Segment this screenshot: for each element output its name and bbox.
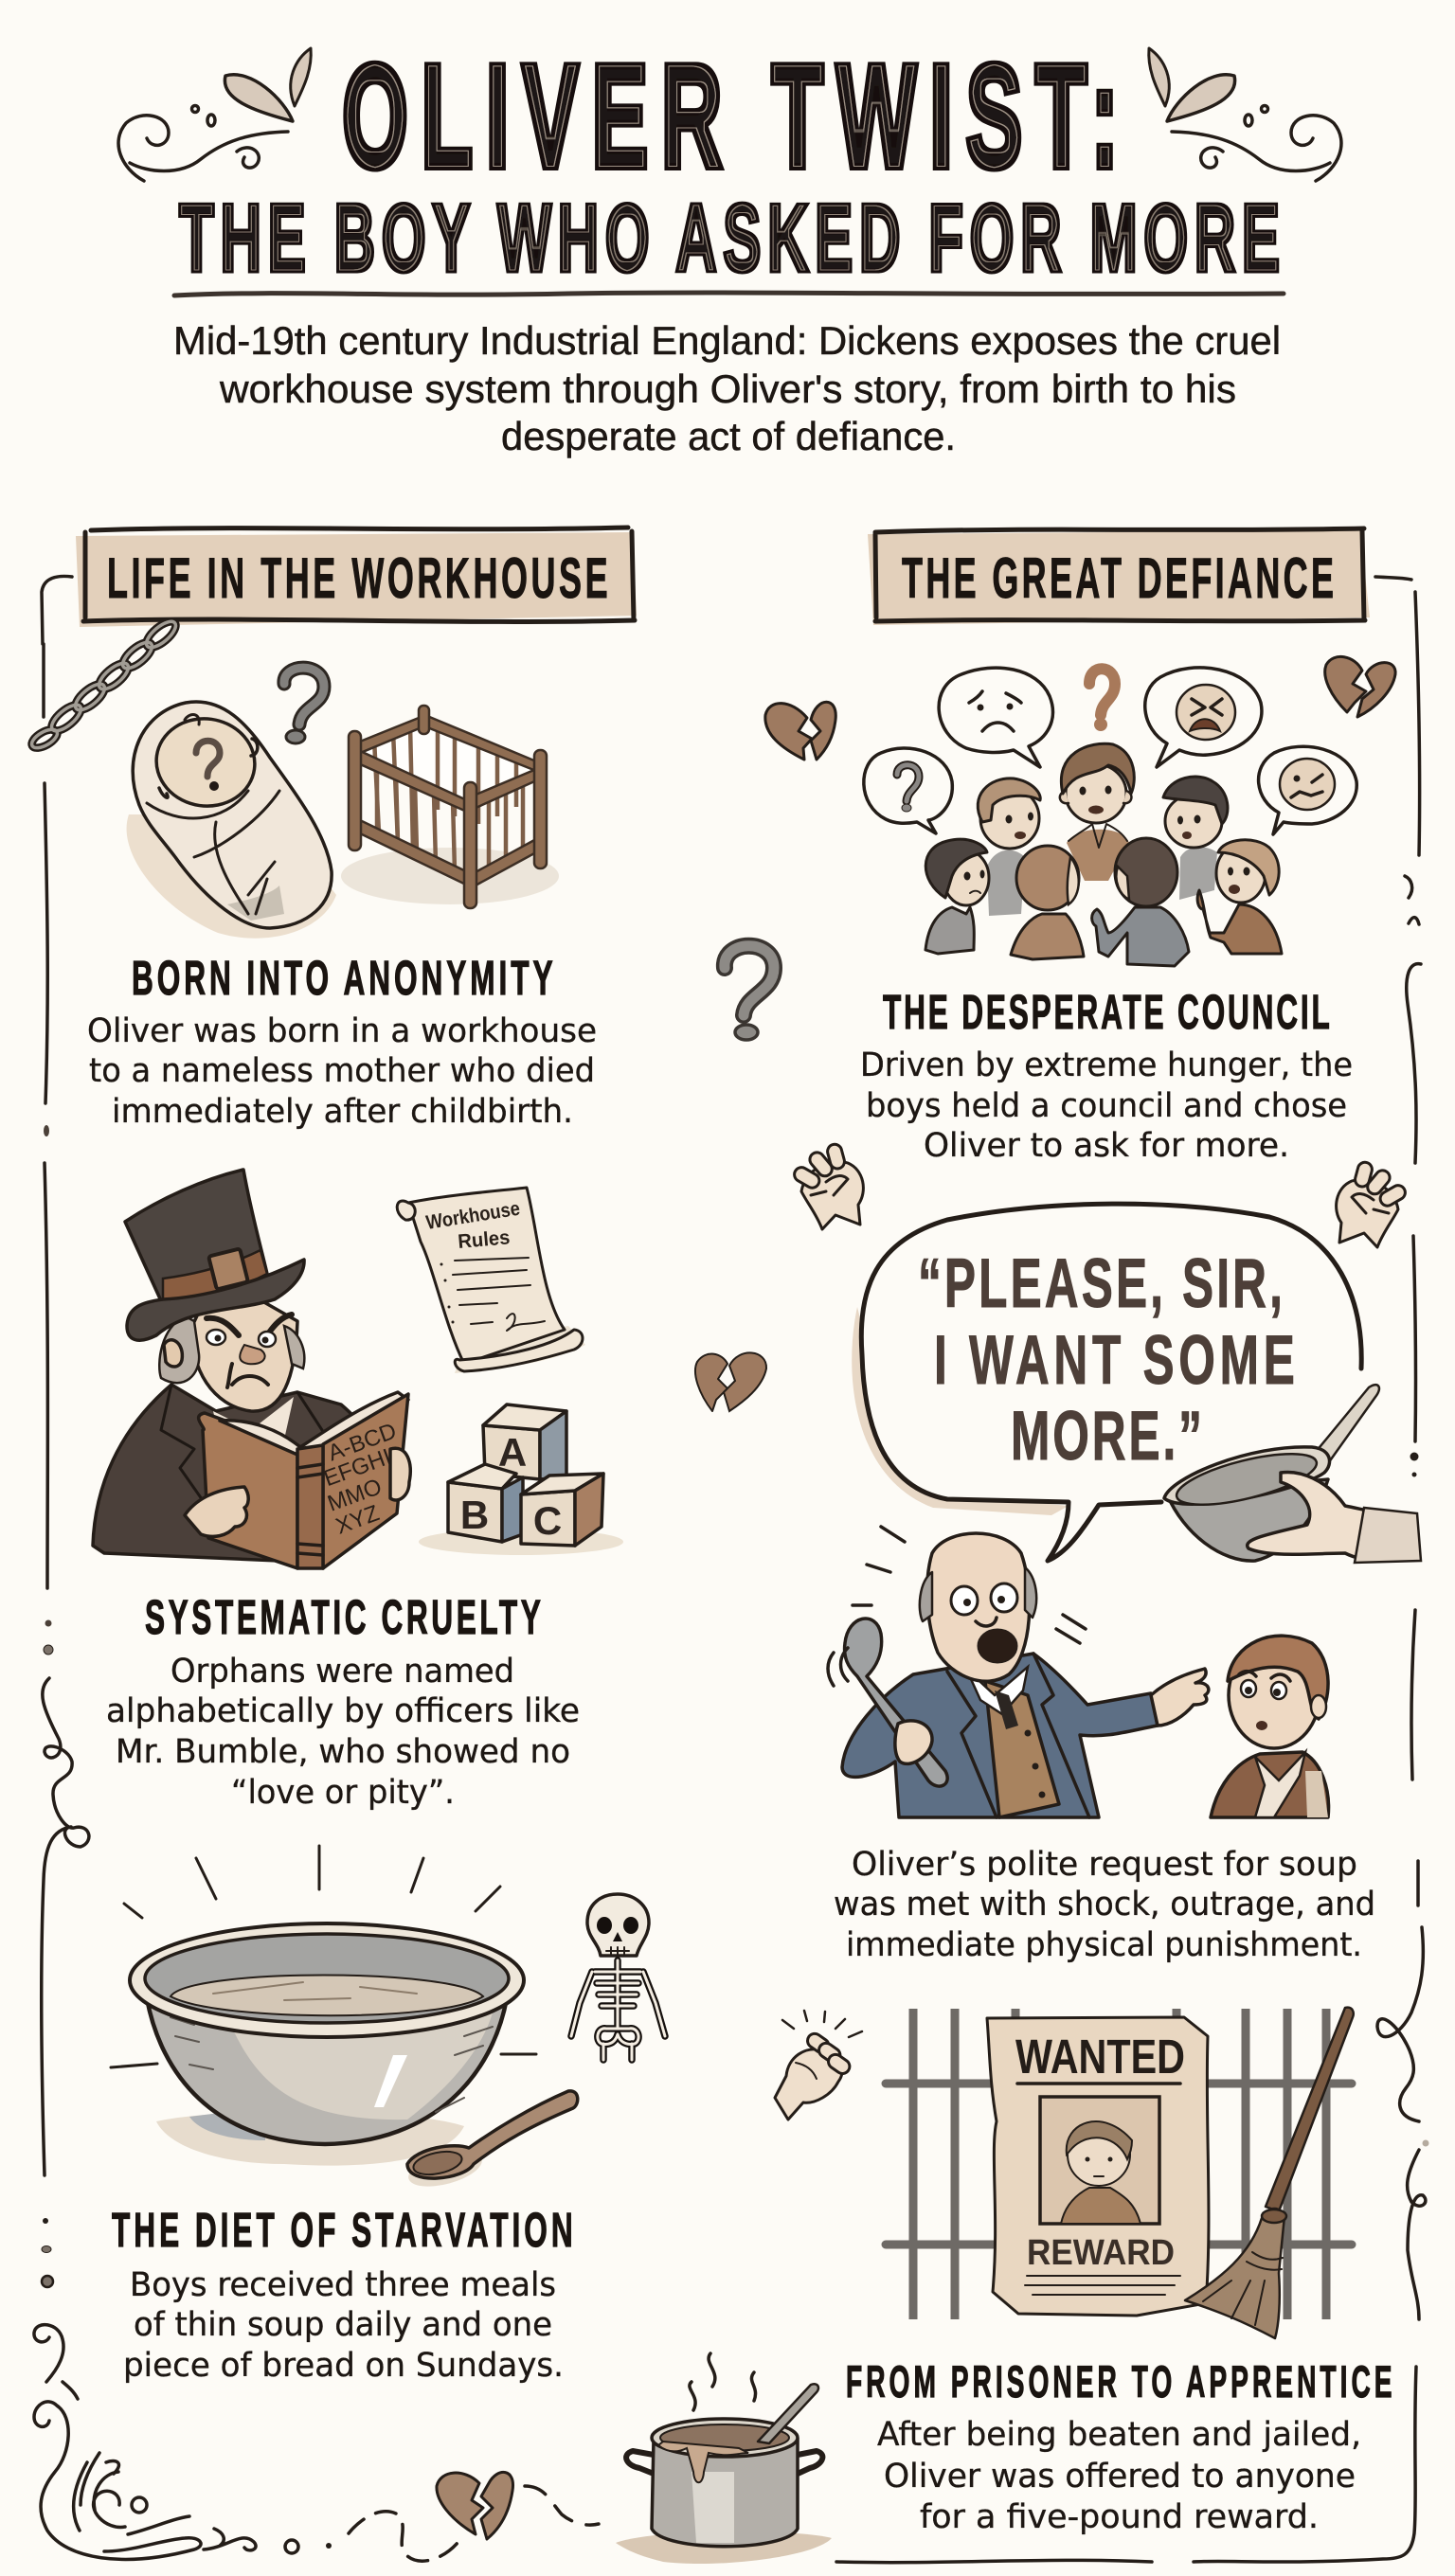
heading: from prisoner to apprentice: FROM PRISONER TO APPRENTICE [846, 2358, 1392, 2407]
boy: back of head left [1011, 846, 1084, 959]
section tag: life in the workhouse [76, 528, 637, 627]
text: the desperate council: Oliver to ask for more. [924, 1127, 1289, 1165]
icon: skeleton [571, 1894, 665, 2060]
icon: question mark by baby [284, 668, 324, 743]
illustration: wanted poster [987, 2017, 1209, 2316]
text: born into anonymity: to a nameless mother who died [89, 1052, 595, 1090]
text: polite request: Oliver’s polite request for soup [852, 1846, 1357, 1884]
text: from prisoner to apprentice: for a five-pound reward. [920, 2498, 1319, 2536]
illustration: alphabet blocks [419, 1404, 623, 1555]
callout: please sir speech bubble: “PLEASE, SIR, [918, 1245, 1283, 1322]
callout: please sir speech bubble: MORE.” [1011, 1398, 1202, 1475]
illustration: mr bumble reading: MMO [324, 1474, 386, 1517]
illustration: alphabet blocks: C [533, 1498, 562, 1543]
illustration: hand holding empty bowl [1164, 1385, 1421, 1563]
heading: the diet of starvation: THE DIET OF STARVATION [112, 2203, 573, 2257]
illustration: alphabet blocks: B [460, 1493, 489, 1537]
illustration: workhouse rules scroll: Workhouse [424, 1198, 522, 1234]
intro text [173, 318, 1281, 458]
border: right [836, 577, 1428, 2563]
heading: born into anonymity: BORN INTO ANONYMITY [132, 951, 553, 1005]
boy: upper right [1163, 777, 1228, 900]
text: the diet of starvation [123, 2266, 564, 2385]
illustration: speech bubbles over council [864, 668, 1356, 834]
text: systematic cruelty: Orphans were named [171, 1653, 514, 1690]
heading: systematic cruelty: SYSTEMATIC CRUELTY [145, 1590, 541, 1644]
subtitle: THE BOY WHO ASKED FOR MORE [179, 185, 1280, 292]
illustration: shocked beadle with ladle [828, 1527, 1209, 1817]
illustration: workhouse rules scroll [397, 1188, 585, 1373]
illustration: swaddled baby [127, 702, 336, 939]
text: born into anonymity: immediately after childbirth. [112, 1093, 573, 1131]
illustration: wooden spoon [404, 2091, 578, 2193]
text: from prisoner to apprentice: After being beaten and jailed, [877, 2416, 1361, 2454]
icon: question mark middle [725, 946, 774, 1040]
text: polite request: was met with shock, outrage, and [834, 1886, 1375, 1923]
illustration: soup pot [616, 2353, 832, 2564]
icon: broken heart top right [1325, 656, 1395, 717]
text: systematic cruelty: “love or pity”. [231, 1774, 455, 1812]
text: the desperate council: Driven by extreme hunger, the [860, 1046, 1353, 1084]
illustration: workhouse rules scroll: Rules [457, 1226, 511, 1253]
text: from prisoner to apprentice: Oliver was offered to anyone [884, 2458, 1356, 2496]
text: the diet of starvation: piece of bread on Sundays. [123, 2347, 564, 2385]
illustration: soup bowl with rays [111, 1846, 536, 2166]
heading: the desperate council: THE DESPERATE COUNCIL [883, 985, 1330, 1039]
flourish: title left [118, 48, 311, 181]
section tag: the great defiance: THE GREAT DEFIANCE [902, 547, 1334, 610]
text: born into anonymity [87, 1012, 597, 1131]
icon: raised fist [775, 2011, 862, 2120]
boy: back center [1060, 743, 1134, 881]
illustration: mr bumble reading: A-BCD [325, 1418, 400, 1466]
icon: fist right [1337, 1161, 1408, 1247]
section tag: the great defiance [868, 528, 1370, 625]
boy: lower left [925, 839, 989, 954]
illustration: wanted poster: REWARD [1027, 2233, 1175, 2273]
illustration: young oliver frightened [1211, 1636, 1329, 1817]
boy: lower right [1197, 840, 1282, 954]
text: systematic cruelty [106, 1653, 580, 1812]
text: polite request [834, 1846, 1375, 1964]
illustration: broom [1185, 2008, 1354, 2338]
text: from prisoner to apprentice [877, 2416, 1361, 2536]
icon: chain [29, 617, 180, 752]
section tag: life in the workhouse: LIFE IN THE WORKHOUSE [107, 547, 608, 610]
illustration: mr bumble reading: XYZ [332, 1500, 383, 1540]
illustration: alphabet blocks: A [498, 1430, 527, 1475]
border: left [42, 576, 89, 2287]
boy: back of head right [1092, 838, 1189, 966]
text: the diet of starvation: Boys received three meals [130, 2266, 556, 2304]
text: polite request: immediate physical punishment. [846, 1926, 1362, 1964]
illustration: prison bars [886, 2009, 1352, 2319]
icon: broken heart bottom [437, 2472, 513, 2539]
text: born into anonymity: Oliver was born in a workhouse [87, 1012, 597, 1050]
illustration: mr bumble reading [93, 1170, 410, 1568]
icon: broken heart top left of right column [765, 702, 835, 760]
callout: please sir speech bubble [852, 1204, 1361, 1561]
illustration: mr bumble reading: EFGHI [320, 1444, 395, 1492]
icon: fist left [792, 1143, 863, 1229]
text: systematic cruelty: alphabetically by officers like [106, 1692, 580, 1730]
icon: question mark above council [1089, 669, 1115, 731]
illustration: group of boys [925, 743, 1282, 966]
intro text: workhouse system through Oliver's story, from birth to his [219, 367, 1236, 411]
text: the desperate council: boys held a council and chose [866, 1087, 1347, 1125]
intro text: desperate act of defiance. [501, 414, 956, 458]
flourish: title right [1149, 48, 1341, 181]
icon: broken heart middle [695, 1352, 766, 1411]
illustration: empty crib [341, 706, 559, 908]
text: the diet of starvation: of thin soup daily and one [134, 2306, 552, 2344]
boy: upper left [978, 778, 1040, 916]
intro text: Mid-19th century Industrial England: Dickens exposes the cruel [173, 318, 1281, 363]
border: corner flourish bottom-left [34, 2325, 599, 2561]
title: OLIVER TWIST: [342, 33, 1119, 198]
illustration: wanted poster: WANTED [1015, 2030, 1185, 2084]
text: systematic cruelty: Mr. Bumble, who showed no [116, 1733, 570, 1771]
text: the desperate council [860, 1046, 1353, 1165]
callout: please sir speech bubble: I WANT SOME [934, 1322, 1295, 1399]
